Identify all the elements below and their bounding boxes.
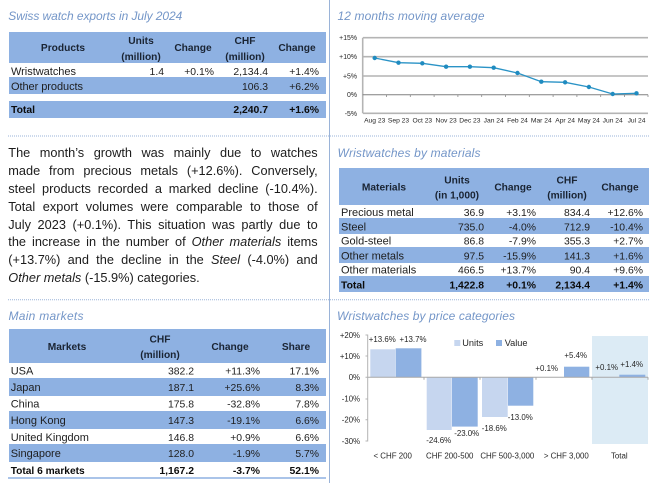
row: Other products: Other products [11, 81, 84, 93]
panel: Wristwatches by materials [338, 146, 649, 292]
bar chart: +13.6% [369, 335, 396, 344]
row: Other metals: 141.3 [564, 251, 590, 262]
panel: Main markets [8, 309, 326, 478]
table header row [9, 32, 326, 63]
text block: commentary paragraph: July 2023 (+0.1%). This situation was partly due to [8, 217, 318, 232]
row: Other metals [339, 247, 649, 263]
text block: commentary paragraph: Other metals (-15.9%) categories. [8, 270, 200, 285]
row: Precious metal: Precious metal [341, 207, 414, 219]
bar chart: +0.1% [595, 363, 618, 372]
bar chart: -23.0% [454, 429, 479, 438]
row: Precious metal: +3.1% [506, 208, 536, 219]
row: Gold-steel: 86.8 [464, 237, 484, 248]
row: Total [339, 276, 649, 292]
row: China: 175.8 [168, 400, 194, 411]
row: Wristwatches: +1.4% [289, 67, 319, 78]
row: Precious metal [341, 207, 643, 219]
row: Singapore: -1.9% [233, 449, 260, 460]
panel: Wristwatches by price categories [337, 309, 648, 461]
row: Japan: +25.6% [224, 383, 260, 394]
bar chart: +5.4% [564, 351, 587, 360]
row: Hong Kong: 6.6% [295, 416, 319, 427]
row: Total 6 markets [8, 466, 326, 478]
table header row: (million) [547, 190, 587, 202]
row: USA: 382.2 [168, 367, 194, 378]
row: USA: +11.3% [225, 367, 260, 378]
line chart: May 24 [578, 118, 600, 124]
row: China [11, 399, 319, 411]
row: Other materials: +13.7% [500, 265, 536, 276]
row: Steel: -4.0% [509, 222, 536, 233]
table header row: (million) [140, 350, 180, 361]
table header row: Units [128, 36, 154, 47]
table header row: Materials [362, 182, 406, 194]
bar chart: -20% [342, 416, 360, 424]
text block: commentary paragraph [8, 145, 318, 285]
row: Other products: 106.3 [242, 82, 268, 93]
bar chart: -24.6% [426, 436, 451, 445]
line chart: 0% [347, 92, 357, 99]
row: Other materials: 466.5 [458, 265, 484, 276]
row: Other materials: 90.4 [570, 265, 590, 276]
row: Steel: 735.0 [458, 222, 484, 233]
line chart: -5% [345, 111, 357, 118]
line chart: +15% [339, 35, 357, 42]
table header row: Products [41, 43, 85, 54]
row: Gold-steel: Gold-steel [341, 236, 391, 248]
text block: commentary paragraph: steel products recorded a marked decline (-10.4%). [8, 181, 318, 196]
text block: commentary paragraph: made from precious metals (+12.6%). Conversely, [8, 163, 318, 178]
row: USA [11, 366, 319, 378]
table header row: Change [601, 182, 639, 194]
row: Precious metal: 36.9 [464, 208, 484, 219]
row: Total: +0.1% [506, 280, 536, 291]
bar chart: -13.0% [508, 413, 533, 422]
table header row: CHF [557, 176, 577, 186]
line chart: Feb 24 [507, 118, 528, 124]
row: Steel [339, 218, 649, 234]
row: Hong Kong [9, 411, 326, 429]
row: Other materials: +9.6% [613, 265, 643, 276]
table header row: (in 1,000) [435, 190, 479, 202]
row: Total: 1,422.8 [449, 280, 484, 291]
bar chart: CHF 500-3,000 [480, 452, 535, 461]
row: Other metals: Other metals [341, 250, 404, 262]
row: Precious metal: 834.4 [564, 208, 590, 219]
row: Gold-steel: +2.7% [613, 237, 643, 248]
bar chart: +10% [340, 352, 360, 361]
line chart: Jul 24 [628, 118, 646, 124]
row: Japan: 8.3% [295, 383, 319, 394]
line chart: Apr 24 [555, 118, 575, 124]
table header row: Share [282, 342, 310, 353]
row: Total: Total [11, 105, 35, 116]
bar chart: < CHF 200 [374, 452, 412, 461]
table header row: (million) [225, 52, 265, 63]
panel: 12 months moving average [338, 9, 648, 124]
table header row: Change [211, 342, 249, 353]
table header row: Units [444, 176, 470, 186]
table header row: Change [174, 43, 212, 54]
heading: Swiss watch exports: Swiss watch exports in July 2024 [8, 9, 183, 23]
row: Total: 2,240.7 [233, 105, 268, 116]
row: United Kingdom: United Kingdom [11, 432, 89, 444]
table header row: Change [494, 182, 532, 194]
chart legend [454, 338, 528, 348]
bar chart: +0.1% [535, 364, 558, 373]
row: Total [9, 101, 326, 118]
row: Wristwatches [11, 66, 319, 78]
line chart: Jun 24 [603, 118, 623, 124]
table header row: (million) [121, 52, 161, 63]
row: Gold-steel: 355.3 [564, 237, 590, 248]
row: Steel: 712.9 [564, 222, 590, 233]
row: Japan [9, 378, 326, 396]
row: China: -32.8% [227, 400, 260, 411]
row: Other metals: +1.6% [613, 251, 643, 262]
row: Other metals: -15.9% [503, 251, 536, 262]
line chart: Aug 23 [364, 118, 386, 124]
chart legend: Units [462, 338, 484, 348]
row: Steel: Steel [341, 221, 366, 233]
row: Other materials: Other materials [341, 264, 417, 276]
row: Steel: -10.4% [610, 222, 643, 233]
line chart: Nov 23 [435, 118, 457, 124]
heading: Wristwatches by price categories: Wristwatches by price categories [337, 309, 515, 323]
text block: commentary paragraph: The month’s growth was mainly due to watches [8, 145, 318, 160]
line chart: Dec 23 [459, 118, 481, 124]
heading: 12 months moving average: 12 months moving average [338, 9, 485, 23]
row: United Kingdom: 146.8 [168, 433, 194, 444]
text block: commentary paragraph: Total export volumes were comparable to those of [8, 199, 318, 214]
row: Total 6 markets: -3.7% [233, 466, 260, 477]
line chart: Sep 23 [388, 118, 409, 124]
heading: Wristwatches by materials: Wristwatches by materials [338, 146, 480, 160]
row: USA: 17.1% [290, 367, 319, 378]
row: Wristwatches: 2,134.4 [233, 67, 268, 78]
bar chart: Total [611, 452, 628, 461]
chart legend: Value [505, 338, 528, 348]
panel: Swiss watch exports table [8, 9, 326, 118]
row: United Kingdom: 6.6% [295, 433, 319, 444]
row: Hong Kong: -19.1% [227, 416, 260, 427]
bar chart: CHF 200-500 [426, 452, 474, 461]
line chart: Oct 23 [412, 118, 432, 124]
line chart: +5% [343, 73, 357, 80]
table header row: Markets [48, 342, 87, 353]
bar chart: -18.6% [482, 424, 507, 433]
row: Total: +1.4% [613, 280, 643, 291]
text block: commentary paragraph: (+13.7%) and the decline in the Steel (-4.0%) and [8, 252, 318, 267]
table header row: CHF [150, 334, 170, 346]
row: Hong Kong: Hong Kong [11, 415, 66, 427]
line chart: Mar 24 [531, 118, 552, 124]
row: China: 7.8% [295, 400, 319, 411]
row: Total: +1.6% [289, 105, 319, 116]
row: Singapore [9, 444, 326, 462]
table header row: CHF [235, 36, 255, 47]
row: Other materials [341, 264, 643, 276]
line chart: +10% [339, 54, 357, 61]
bar chart: -10% [342, 395, 360, 404]
row: Total 6 markets: 52.1% [290, 466, 319, 477]
row: Japan: Japan [11, 382, 41, 394]
row: Other metals: 97.5 [464, 251, 484, 262]
line chart: Jan 24 [484, 118, 504, 124]
row: Gold-steel [341, 236, 643, 248]
row: Wristwatches: +0.1% [184, 67, 214, 78]
text block: commentary paragraph: the increase in the number of Other materials items [8, 234, 318, 249]
row: Gold-steel: -7.9% [509, 237, 536, 248]
bar chart: -30% [342, 437, 360, 446]
row: Wristwatches: 1.4 [150, 67, 164, 78]
row: USA: USA [11, 366, 34, 378]
line chart [339, 35, 648, 124]
row: Japan: 187.1 [168, 383, 194, 394]
bar chart: +20% [340, 331, 360, 340]
bar chart: > CHF 3,000 [544, 452, 589, 461]
table header row [9, 329, 326, 363]
row: United Kingdom: +0.9% [230, 433, 260, 444]
row: Singapore: 5.7% [295, 449, 319, 460]
row: Total: 2,134.4 [555, 280, 590, 291]
bar chart [340, 331, 648, 461]
bar chart: +1.4% [620, 360, 643, 369]
row: Total: Total [341, 280, 365, 291]
row: Wristwatches: Wristwatches [11, 66, 76, 78]
table header row: Change [278, 43, 316, 54]
bar chart: +13.7% [400, 335, 426, 344]
row: Hong Kong: 147.3 [168, 416, 194, 427]
row: Singapore: 128.0 [168, 449, 194, 460]
row: Singapore: Singapore [11, 448, 61, 460]
table header row [339, 168, 649, 205]
row: United Kingdom [11, 432, 319, 444]
row: China: China [11, 399, 40, 411]
row: Total 6 markets: 1,167.2 [159, 466, 194, 477]
bar chart: 0% [349, 373, 360, 382]
row: Other products [9, 77, 326, 94]
row: Total 6 markets: Total 6 markets [11, 466, 85, 477]
row: Other products: +6.2% [289, 82, 319, 93]
row: Precious metal: +12.6% [607, 208, 643, 219]
heading: Main markets: Main markets [8, 309, 84, 323]
